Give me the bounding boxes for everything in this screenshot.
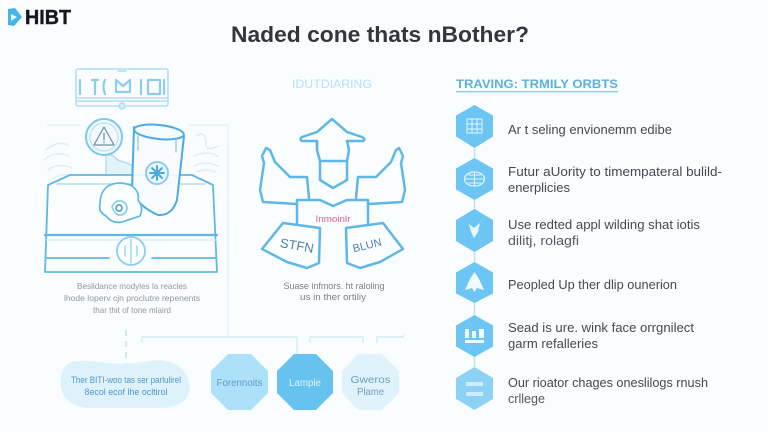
text: left caption: lhode loperv cjn proclutre repenents [64, 293, 200, 303]
list item 3: Use redted appl wilding shat iotis [508, 217, 700, 232]
list item 4 [456, 262, 677, 303]
text: left caption: thar thit of tone mlaird [93, 305, 171, 315]
text: middle caption: us in ther ortiliy [300, 292, 366, 303]
text: middle caption: Suase infmors. ht raloling [284, 281, 384, 292]
icon: warning badge [86, 119, 132, 175]
icon: cup [132, 122, 185, 215]
box body [45, 175, 217, 272]
logo: HIBT: HIBT [25, 7, 71, 29]
callout: bottom blob [60, 360, 190, 408]
left shield [262, 223, 320, 268]
shield text: STFN: STFN [279, 235, 315, 256]
list item 1 [456, 105, 672, 148]
heading: middle column: IDUTDIARING [292, 77, 372, 91]
octagon: Lample: Lample [289, 377, 321, 389]
icon: rock [100, 183, 142, 222]
list item 2: Futur aUority to timempateral bulild- [508, 164, 722, 179]
list item 2 [456, 158, 722, 200]
hat and neck [300, 119, 364, 188]
title: Naded cone thats nBother? [231, 22, 529, 47]
icon: toolbar panel [76, 69, 168, 109]
octagon: Gweros Plame: Gweros [350, 374, 390, 386]
right shield [346, 223, 403, 268]
icon: side waves left [44, 143, 72, 180]
callout: bottom blob: Ther BITI-woo tas ser parlulirel [71, 375, 181, 385]
text: left caption: Beslidance modyles la reacles [77, 281, 187, 291]
list item 5 [456, 315, 694, 357]
list item 5: Sead is ure. wink face orrgnilect [508, 320, 694, 335]
icon: side waves right [194, 134, 218, 172]
centre box [297, 200, 368, 223]
list item 6 [456, 367, 708, 410]
list item 5: garm refalleries [508, 336, 598, 351]
text: middle caption [284, 281, 384, 303]
heading: right column: TRAVING: TRMILY ORBTS [456, 77, 618, 91]
panel: middle figure [260, 119, 405, 268]
octagon: Gweros Plame: Plame [357, 386, 384, 398]
shield text: BLUN: BLUN [352, 237, 383, 255]
list item 4: Peopled Up ther dlip ounerion [508, 277, 677, 292]
list item 3: dilitj, rolagfi [508, 233, 579, 248]
list item 6: Our rioator chages oneslilogs rnush [508, 375, 708, 390]
right arm [356, 148, 405, 204]
callout: bottom blob: 8ecol ecof lhe ocltirol [84, 387, 168, 397]
octagon: Lample [277, 354, 333, 410]
left arm [260, 148, 309, 204]
list item 1: Ar t seling envionemm edibe [508, 122, 672, 137]
text: left caption [64, 281, 200, 315]
connector lines [47, 125, 403, 367]
octagon: Gweros Plame [342, 354, 399, 410]
hexagon spine [474, 148, 476, 367]
octagon: Forennoits: Forennoits [216, 377, 262, 389]
list item 2: enerplicies [508, 180, 570, 195]
neck band [317, 141, 347, 161]
octagon: Forennoits [211, 354, 268, 410]
panel: left illustration [44, 69, 218, 272]
list item 3 [456, 209, 700, 252]
pink label: Inmoinlr [316, 214, 350, 224]
list item 6: crllege [508, 391, 545, 406]
